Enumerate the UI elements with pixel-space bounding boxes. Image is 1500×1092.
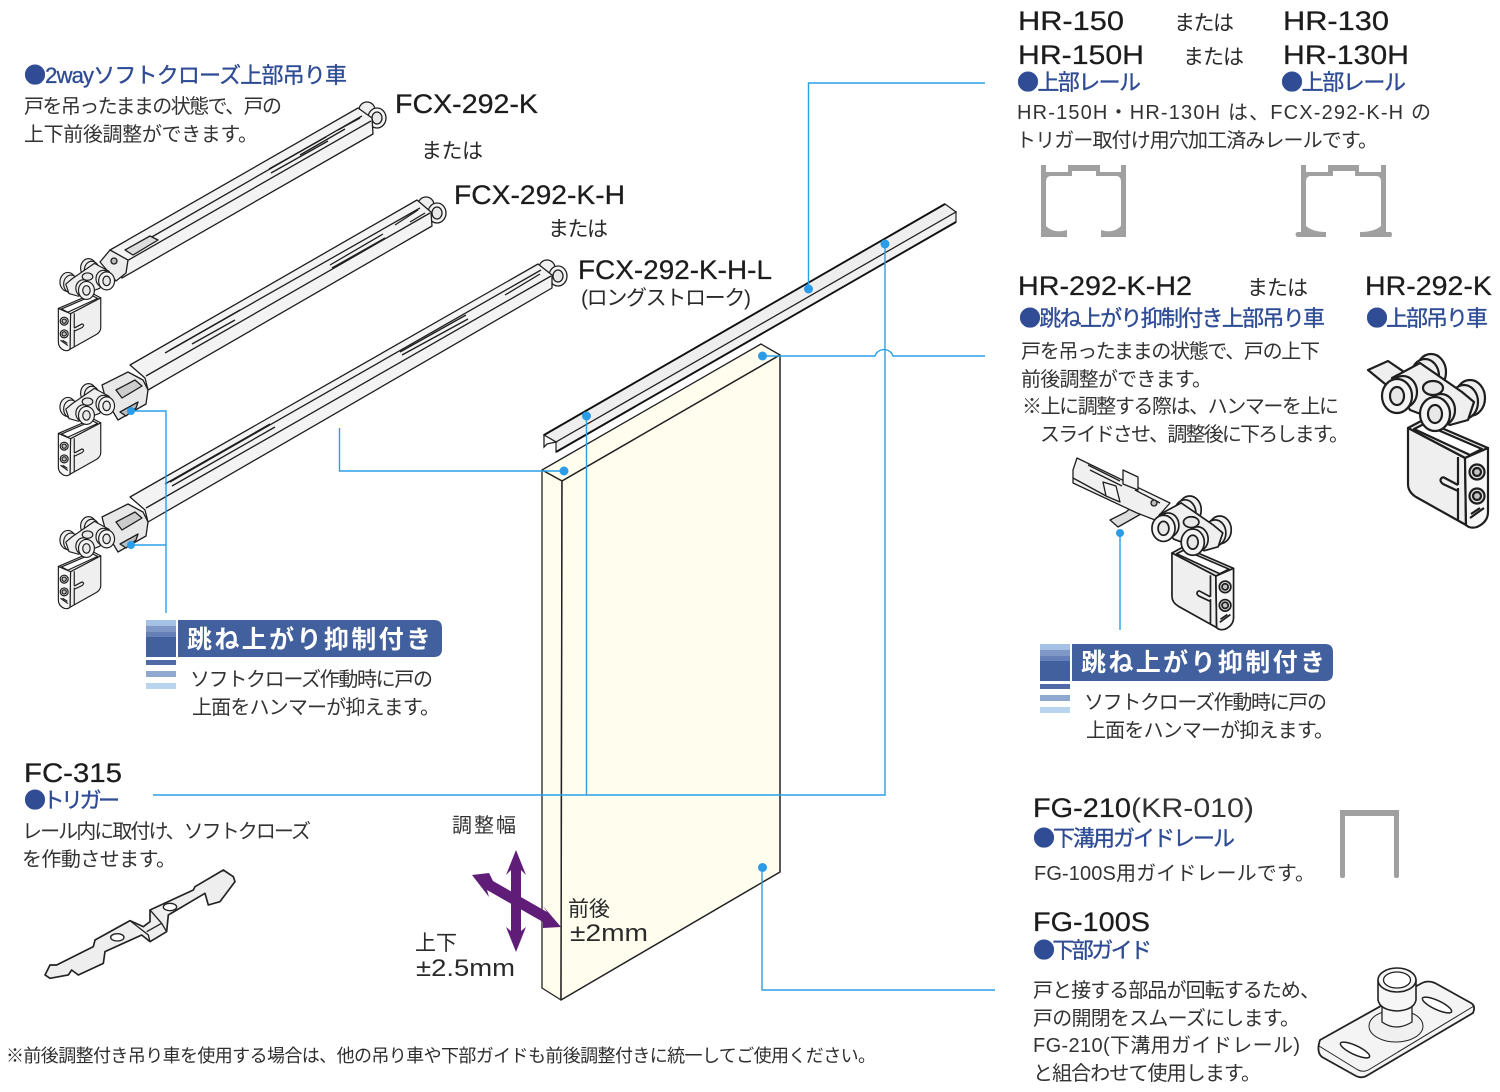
or label 2: または [548,218,608,241]
hanger illustration: FCX-292-K [58,102,386,351]
model label: FG-100S: FG-100S [1033,907,1150,937]
hanger illustration: FCX-292-K-H-L [58,260,567,609]
rail description: トリガー取付け用穴加工済みレールです。 [1016,129,1378,152]
heading: upper rail A: ●上部レール [1017,65,1141,97]
door panel [542,344,780,1000]
front-back adjustment value [568,898,648,947]
hanger description [1021,340,1349,446]
lower guide description: 戸と接する部品が回転するため、 [1033,979,1320,1002]
badge description (right) [1084,691,1334,742]
model label: HR-150H: HR-150H [1018,40,1144,70]
description: hanger adjustment: 戸を吊ったままの状態で、戸の [24,95,282,118]
model label: HR-292-K: HR-292-K [1365,271,1492,301]
badge: hop-up suppression (right): 跳ね上がり抑制付き [1081,648,1325,677]
model label: FCX-292-K-H: FCX-292-K-H [454,180,625,210]
badge description (left): 上面をハンマーが抑えます。 [192,696,440,719]
model label: HR-130H: HR-130H [1283,40,1409,70]
rail description: HR-150H・HR-130H は、FCX-292-K-H の [1017,102,1431,124]
trigger label: FC-315: FC-315 [24,758,122,788]
model label: FCX-292-K-H-L: FCX-292-K-H-L [578,255,772,285]
icon: rail profile HR-130 [1296,165,1392,237]
heading: hop-suppressed upper hanger: ●跳ね上がり抑制付き上部吊り車 [1019,301,1325,333]
up-down adjustment value [415,932,515,982]
lower guide description: と組合わせて使用します。 [1033,1062,1261,1085]
badge: hop-up suppression (right) [1040,644,1333,713]
trigger description: を作動させます。 [22,848,176,871]
heading: 2way soft close upper hanger: ●2wayソフトクローズ上部吊り車 [24,58,347,90]
badge: hop-up suppression (left) [146,620,442,689]
upper rail illustration [544,204,956,452]
lower guide description [1033,979,1320,1085]
model label: HR-150: HR-150 [1018,6,1124,36]
trigger description [22,820,311,871]
or label 3: または [1174,12,1234,35]
icon: hanger HR-292-K-H2 [1073,458,1234,630]
hanger description: 前後調整ができます。 [1021,368,1212,391]
leader lines and dots [127,83,1124,990]
trigger description: レール内に取付け、ソフトクローズ [22,820,311,843]
up-down adjustment value: 上下 [415,932,457,955]
badge: hop-up suppression (left): 跳ね上がり抑制付き [187,625,431,654]
up-down adjustment value: ±2.5mm [416,955,515,982]
icon: adjustment arrows [472,850,561,952]
icon: guide rail profile [1340,810,1399,878]
description: hanger adjustment [24,95,282,146]
model label: FG-210 [1033,793,1254,823]
lower guide description: 戸の開閉をスムーズにします。 [1033,1007,1300,1030]
FG-210 description: FG-100S用ガイドレールです。 [1034,862,1315,885]
heading: trigger: ●トリガー [24,783,120,815]
model label: FCX-292-K: FCX-292-K [395,89,538,119]
model label: HR-130: HR-130 [1283,6,1389,36]
badge description (right): ソフトクローズ作動時に戸の [1084,691,1327,714]
model label: HR-292-K-H2: HR-292-K-H2 [1018,271,1192,301]
adjustment range label: 調整幅 [452,814,516,837]
hanger description: スライドさせ、調整後に下ろします。 [1040,423,1349,446]
footnote: ※前後調整付き吊り車を使用する場合は、他の吊り車や下部ガイドも前後調整付きに統一してご使用ください。 [6,1046,876,1066]
or label 1: または [421,140,483,163]
front-back adjustment value: ±2mm [570,920,648,947]
model label: FG-210: (KR-010) [1131,793,1254,823]
hanger description: ※上に調整する際は、ハンマーを上に [1022,395,1339,418]
hanger description: 戸を吊ったままの状態で、戸の上下 [1021,340,1320,363]
badge description (left): ソフトクローズ作動時に戸の [190,668,433,691]
hanger illustration: FCX-292-K-H [58,197,446,476]
or label 4: または [1183,46,1244,69]
heading: lower guide: ●下部ガイド [1033,933,1152,965]
or label 5: または [1247,277,1308,300]
heading: lower groove guide rail: ●下溝用ガイドレール [1033,821,1235,853]
icon: lower guide part [1318,968,1474,1077]
icon: rail profile HR-150 [1041,165,1126,237]
lower guide description: FG-210(下溝用ガイドレール) [1033,1034,1300,1057]
front-back adjustment value: 前後 [568,898,610,921]
heading: upper rail B: ●上部レール [1281,65,1406,97]
badge description (right): 上面をハンマーが抑えます。 [1086,719,1334,742]
heading: upper hanger: ●上部吊り車 [1366,301,1488,333]
description: hanger adjustment: 上下前後調整ができます。 [24,123,258,146]
icon: trigger part [45,870,235,978]
icon: hanger HR-292-K [1368,354,1488,528]
rail description [1016,102,1431,152]
long stroke note: (ロングストローク) [581,287,751,310]
model label: FG-210: FG-210 [1033,793,1131,823]
badge description (left) [190,668,440,719]
